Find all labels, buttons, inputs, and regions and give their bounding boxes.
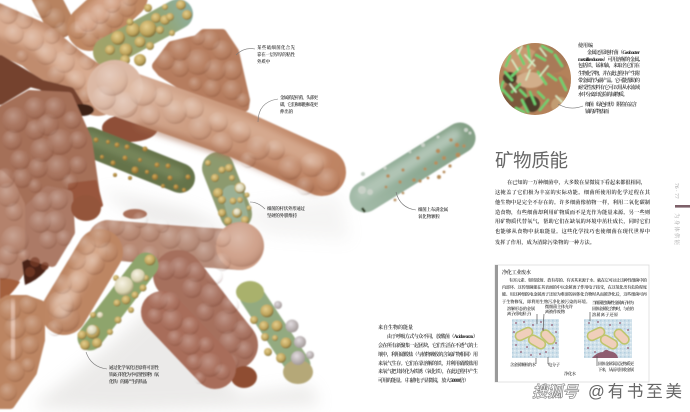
side folio: page numbers and section: 76 · 77 bbox=[673, 183, 679, 199]
text block: main paragraph bbox=[495, 178, 651, 246]
note: outer membrane: 细菌的杆状外形通过 bbox=[267, 205, 306, 212]
diagram labels: 净化水 bbox=[564, 370, 576, 376]
soft drop shadows beneath bacteria bbox=[30, 190, 350, 412]
text block: energy from organisms: 由于呼吸方式与众不同，放酸菌（Acidovorax） bbox=[387, 333, 478, 340]
leader line: rod note bbox=[258, 99, 278, 122]
text block: Geobacter note bbox=[578, 42, 641, 98]
note: surface particles: 细菌上布满金属 bbox=[418, 206, 449, 213]
note: iron crystals: 通过化学氧化还原将可溶性 bbox=[109, 364, 160, 371]
bacterium: middle green vertical rod bbox=[205, 160, 252, 225]
panel text: 有害元素、如铬放射、放有毒的、有害其来源于水。就在它可以让这种性细菌中的 bbox=[509, 276, 647, 282]
text block: Geobacter note: 耐受性废料有它可以用从水流域 bbox=[578, 84, 640, 91]
text block: main paragraph: 造食物，有些细菌却利用矿物质而不是光作为能量来源。另一些则 bbox=[495, 208, 650, 216]
diagram labels: 溶解形态的金属 bbox=[507, 305, 535, 311]
title: 矿物质能 bbox=[495, 147, 568, 173]
note: surface particles bbox=[418, 206, 449, 220]
bacterium: upper brown diagonal rod bbox=[155, 257, 257, 388]
note: outer membrane: 坚硬的外膜维持 bbox=[267, 212, 298, 219]
bacterium: upper right brown cluster bbox=[155, 30, 250, 107]
note: slime coating bbox=[257, 44, 296, 65]
bacterium: large brown cluster at left bbox=[0, 95, 101, 212]
panel heading: 净化工业废水 bbox=[502, 268, 532, 276]
diagram labels: 电分子 bbox=[548, 361, 560, 367]
panel: industrial wastewater purification bbox=[495, 265, 649, 382]
text block: energy from organisms: 来自生物的能量 bbox=[378, 324, 413, 331]
diagram labels bbox=[507, 299, 634, 376]
text block: energy from organisms: 会在所有新聚集一起团块，它们生活在不透气的土 bbox=[378, 342, 478, 349]
note: slime coating: 某些硫细菌化合先 bbox=[257, 44, 296, 51]
bacterium: top yellow-green rod with nodules bbox=[105, 0, 192, 66]
text block: Geobacter note: 金属还原地杆菌（Geobacter bbox=[587, 49, 641, 56]
watermark bbox=[532, 380, 682, 402]
note: cell shape bbox=[280, 94, 319, 115]
bacterium: central horizontal rod bbox=[91, 209, 264, 271]
metal sediment bbox=[592, 350, 618, 358]
text block: energy from organisms: 壤中，利用硝酸盐（与植物吸收的含氮矿物相同）用 bbox=[378, 351, 478, 358]
note: iron crystals: 铁离子转化为不可溶性铁物（氧 bbox=[109, 371, 160, 378]
leader line: capsule note bbox=[236, 49, 255, 55]
panel text: 能。用这种细的电金属离子还原为难溶的固体化合物时从而被净化后，这些细菌可再 bbox=[502, 290, 647, 296]
text block: Geobacter note: 水中分离出危险的铀物质。 bbox=[578, 91, 628, 98]
caption: micrograph bbox=[585, 101, 637, 115]
bacterium: lower right green rod bbox=[236, 281, 314, 384]
text block: Geobacter note: 带金属作为副产品。它可能帮助的 bbox=[578, 77, 640, 84]
text block: energy from organisms: 可用的能量。（扫描电子显微镜，放大50000倍） bbox=[378, 377, 469, 384]
text block: main paragraph: 发挥了作用，成为清除污染物的一种方法。 bbox=[495, 238, 595, 246]
bacterium: lower left overlap pieces bbox=[0, 168, 101, 302]
text block: Geobacter note: 包括铁、锰和铀，来取名它们在 bbox=[578, 62, 640, 69]
text block: Geobacter note: 使用编 bbox=[578, 42, 593, 49]
note: outer membrane bbox=[267, 205, 306, 219]
note: cell shape: 金属菌是杆菌，头部更 bbox=[280, 94, 319, 101]
caption: micrograph: 铀的矿物表面 bbox=[585, 108, 609, 115]
panel text bbox=[502, 276, 647, 304]
diagram labels: 溶属离子还原 bbox=[592, 311, 619, 317]
circular micrograph: green bacteria on mineral bbox=[499, 43, 573, 115]
watermark: @有书至美 bbox=[588, 382, 682, 401]
bacterium: large pale green rod with rust spots bbox=[358, 128, 472, 212]
text block: main paragraph: 用矿物质代替氧气，帮助它们在缺氧的环境中茁壮成长，同时它们 bbox=[495, 217, 650, 225]
bacterium: lower left diagonal rod bbox=[46, 226, 118, 336]
diagram labels: 离子(带电粒子) bbox=[507, 310, 532, 316]
note: iron crystals: 化铁）的副产生的铁晶 bbox=[109, 378, 148, 385]
text block: main paragraph: 在已知的一万种细菌中，大多数在显微镜下看起来都很相同， bbox=[507, 178, 646, 186]
diagram: precipitated metal tank bbox=[584, 319, 632, 358]
text block: Geobacter note: 生物化学物，并在此过程中产生附 bbox=[578, 70, 640, 77]
diagram labels: 固体金属化合物时，与在的 bbox=[592, 305, 634, 311]
bacterium: top back brown rod bbox=[32, 0, 70, 38]
leader line: surface particles note bbox=[396, 192, 416, 210]
bacterium: main salmon rod in front bbox=[87, 60, 340, 195]
text block: energy from organisms bbox=[378, 324, 478, 384]
caption: micrograph: 细菌（绿色杆状）附着在富含 bbox=[585, 101, 637, 108]
bacterium: dark green rod with orange nodules bbox=[84, 132, 190, 192]
diagram leader lines bbox=[536, 312, 597, 366]
note: iron crystals bbox=[109, 364, 160, 385]
leader line: outer membrane note bbox=[250, 202, 265, 209]
side folio: page numbers and section bbox=[673, 183, 690, 245]
text block: main paragraph: 他生物中是完全不存在的。许多细菌像植物一样，利用二氧化碳制 bbox=[495, 198, 650, 206]
side folio: page numbers and section: 为身体供能 bbox=[673, 213, 681, 245]
note: slime coating: 靠在一层厚厚的粘性 bbox=[257, 51, 296, 58]
diagram labels: 微细菌主体允许 bbox=[545, 303, 573, 309]
leader line: iron crystal note bbox=[86, 352, 107, 369]
note: cell shape: 伸出的 bbox=[280, 108, 294, 115]
text block: main paragraph: 也能够从食物中获取能量。这些化学技巧也使细菌在现代世界中 bbox=[495, 227, 650, 235]
panel text: 于生物修复，即利用生物污净化被污染的环境。 bbox=[502, 298, 590, 304]
diagram labels: 固体金属氧沉淀物质更 bbox=[598, 360, 634, 366]
illustration: microscope image of bacteria cluster bbox=[0, 0, 472, 404]
diagram labels: 当细菌把溶解性金属离子转为 bbox=[592, 299, 634, 305]
bacterium: far left lower rod bbox=[0, 296, 43, 404]
text block: main paragraph: 这掩盖了它们极为丰富的实际功能。细菌所使用的化学过程在其 bbox=[495, 188, 651, 196]
note: slime coating: 外质中 bbox=[257, 58, 271, 65]
panel text: 内部环。这传细菌能在其表面的中以金属离子作用电子接受，在这氧化出有危险程度 bbox=[502, 284, 647, 290]
leader line: micrograph caption bbox=[558, 104, 583, 108]
note: cell shape: 碳，它们和细胞和花更 bbox=[280, 101, 319, 108]
diagram labels: 含金属颗粒的水 bbox=[510, 361, 536, 367]
note: surface particles: 氧化物颗粒 bbox=[418, 213, 441, 220]
diagram: dissolved metal tank bbox=[512, 319, 559, 358]
text block: energy from organisms: 来氧气把其转化为铁锈（氧化铁），在此过程中产生 bbox=[378, 368, 478, 375]
bacterium: top left salmon rod bbox=[0, 4, 98, 103]
bacterium: lower green rod with white ball bbox=[78, 254, 156, 350]
bacterium: top brown rod bbox=[69, 0, 138, 51]
bacterium: dark brown shadowed mass at left bbox=[0, 60, 158, 142]
bacterium: lower brown diagonal rod bbox=[147, 290, 230, 384]
text block: energy from organisms: 来氧气生存。它们在靠溶解的铁，并利用硝酸盐用 bbox=[378, 360, 478, 367]
text block: Geobacter note: metallireducens）可用溶解的金属, bbox=[578, 56, 641, 63]
diagram labels: 下来，从而可回收金属 bbox=[598, 366, 634, 372]
watermark: 搜狐号 bbox=[532, 380, 579, 402]
diagram labels: 离被作废物 bbox=[545, 308, 565, 314]
